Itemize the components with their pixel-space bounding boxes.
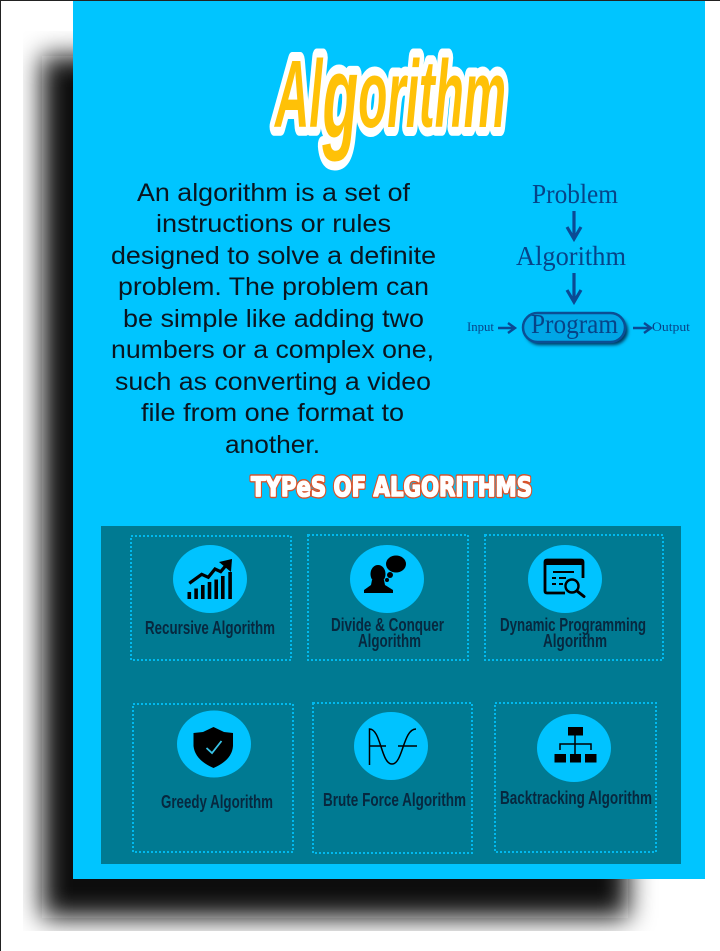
section heading: TYPeS OF ALGORITHMS	[251, 472, 532, 503]
card: backtracking algorithm	[495, 703, 656, 852]
intro paragraph: problem. The problem can	[118, 273, 429, 301]
card: dynamic programming algorithm	[485, 535, 663, 660]
title: Al	[275, 41, 371, 148]
drop shadow	[42, 56, 628, 918]
arrow: output	[633, 323, 651, 333]
diagram label: input: Input	[467, 319, 494, 334]
text: orithm	[358, 41, 506, 148]
card: brute force algorithm	[313, 703, 472, 853]
icon: wave curve	[370, 729, 417, 765]
title	[274, 31, 506, 163]
label: Algorithm	[358, 631, 421, 651]
intro paragraph: instructions or rules	[156, 210, 391, 238]
icon: rising bar chart	[188, 559, 232, 599]
card: recursive algorithm	[131, 536, 291, 660]
label	[331, 615, 444, 651]
label: Dynamic Programming	[500, 615, 646, 635]
icon: dashboard with magnifier	[545, 560, 584, 596]
card: greedy algorithm	[133, 704, 293, 852]
title: g	[322, 31, 358, 163]
arrow: algorithm to program	[567, 273, 581, 302]
intro paragraph: such as converting a video	[115, 368, 431, 396]
diagram label: problem: Problem	[532, 179, 618, 209]
label: Brute Force Algorithm	[323, 790, 466, 810]
program pill: Program	[531, 309, 618, 339]
intro paragraph: An algorithm is a set of	[137, 179, 410, 207]
intro paragraph: another.	[225, 431, 320, 459]
label: Algorithm	[543, 631, 607, 651]
icon: shield with check	[194, 727, 233, 768]
title: Al	[275, 41, 371, 148]
panel: types of algorithms	[101, 526, 681, 864]
arrow: input	[498, 323, 515, 333]
intro paragraph: designed to solve a definite	[111, 242, 436, 270]
intro paragraph: be simple like adding two	[123, 305, 424, 333]
card: divide and conquer algorithm	[308, 535, 468, 660]
title: g	[322, 31, 358, 163]
text: orithm	[358, 41, 506, 148]
label	[500, 615, 646, 651]
intro paragraph: file from one format to	[141, 399, 404, 427]
intro paragraph: numbers or a complex one,	[111, 336, 434, 364]
icon: person thinking	[364, 556, 406, 593]
label: Backtracking Algorithm	[500, 788, 652, 808]
intro paragraph	[111, 179, 436, 459]
diagram label: output: Output	[652, 319, 690, 334]
label: Recursive Algorithm	[145, 618, 275, 638]
icon: hierarchy	[554, 727, 596, 762]
label: Divide & Conquer	[331, 615, 444, 635]
flow diagram	[467, 179, 690, 345]
section heading: TYPeS OF ALGORITHMS	[251, 472, 532, 503]
arrow: problem to algorithm	[567, 211, 581, 239]
diagram label: algorithm: Algorithm	[516, 241, 626, 271]
label: Greedy Algorithm	[161, 792, 273, 812]
